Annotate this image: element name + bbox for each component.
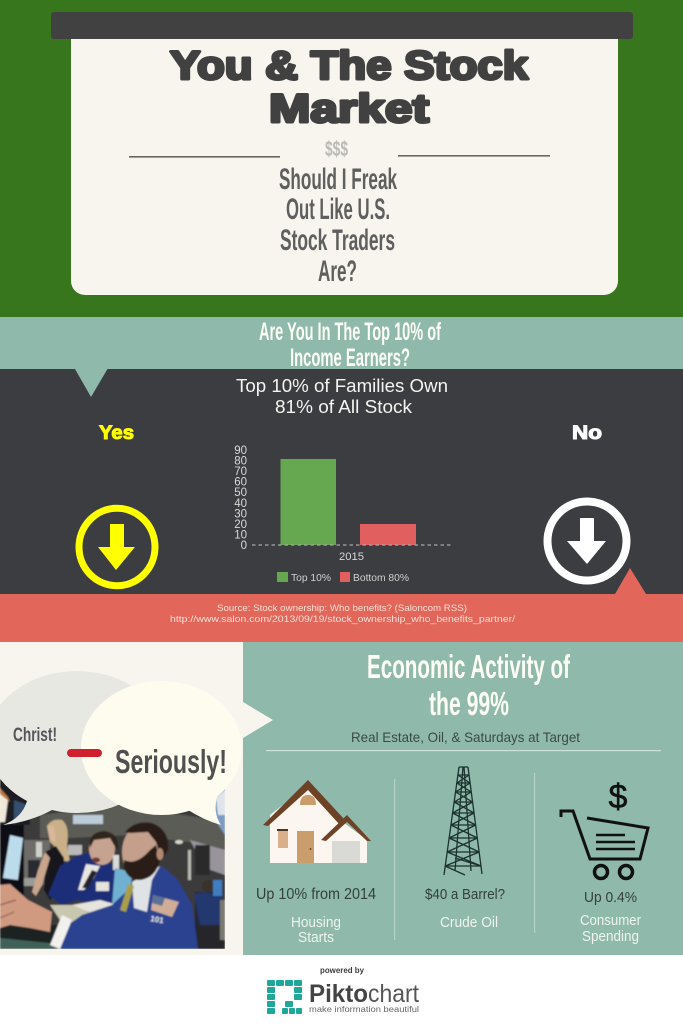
left monitor <box>0 825 24 895</box>
icon: oil derrick <box>444 767 482 875</box>
legend: Bottom 80% <box>353 572 409 584</box>
stat: consumer spending: Consumer <box>580 913 641 929</box>
yes label: Yes <box>99 423 134 444</box>
dollar signs: $$$ <box>325 138 348 161</box>
dollar sign: $ <box>609 778 628 816</box>
ceiling <box>40 805 225 850</box>
icon: white down arrow <box>548 502 626 580</box>
main trader head <box>120 830 159 864</box>
stat: housing: Housing <box>291 915 341 931</box>
y axis labels <box>234 445 247 552</box>
x axis label: 2015 <box>339 551 364 563</box>
y axis labels: 80 <box>234 456 247 468</box>
title: You & The Stock <box>170 44 529 88</box>
photo: traders <box>0 775 225 949</box>
panel: dark chart section <box>0 369 683 594</box>
source text <box>170 603 515 625</box>
photo: traders: 101 <box>150 914 165 925</box>
subtitle: Are? <box>318 255 357 288</box>
blonde woman <box>47 820 70 862</box>
band pointer <box>75 369 108 397</box>
source text: http://www.salon.com/2013/09/19/stock_ownership_who_benefits_partner/ <box>170 614 515 625</box>
top left corner <box>0 780 30 825</box>
y axis labels: 60 <box>234 477 247 489</box>
stat: housing: Starts <box>298 930 334 946</box>
wordmark: chart <box>368 980 419 1008</box>
icon: house <box>263 780 371 863</box>
panel: header <box>0 0 683 317</box>
heading: the 99% <box>429 685 509 722</box>
legend: Top 10% <box>291 572 331 584</box>
subtitle <box>279 163 397 288</box>
panel: source footer band <box>0 568 683 642</box>
red pointer <box>615 568 646 594</box>
back trader <box>194 892 213 936</box>
stat: consumer spending: Spending <box>582 929 639 945</box>
chart title: Top 10% of Families Own <box>236 375 448 396</box>
y axis labels: 70 <box>234 466 247 478</box>
y axis labels: 90 <box>234 445 247 457</box>
legend <box>277 572 409 584</box>
no label: No <box>572 423 602 444</box>
bubble: Seriously <box>81 681 242 825</box>
y axis labels: 40 <box>234 498 247 510</box>
bar chart <box>234 445 452 584</box>
panel: top 10% question band <box>0 317 683 372</box>
subtitle: Should I Freak <box>279 163 397 196</box>
stat: crude oil: $40 a Barrel? <box>425 886 505 903</box>
heading <box>367 648 571 722</box>
y axis labels: 50 <box>234 487 247 499</box>
stat: housing <box>256 886 376 946</box>
stat: consumer spending <box>580 889 641 945</box>
red dash <box>67 749 102 757</box>
Christ! text: Christ! <box>13 725 57 746</box>
panel: traders photo and speech bubbles <box>0 642 243 955</box>
stat: housing: Up 10% from 2014 <box>256 886 376 903</box>
background shelves <box>22 840 50 885</box>
bar: bottom 80% <box>360 524 416 545</box>
subtitle: Stock Traders <box>280 224 395 257</box>
hanger bar <box>51 12 633 39</box>
y axis labels: 20 <box>234 519 247 531</box>
title <box>170 44 529 131</box>
wordmark: make information beautiful <box>309 1005 419 1014</box>
powered by: powered by <box>320 965 364 975</box>
y axis labels: 0 <box>241 540 247 552</box>
wordmark: Pikto <box>309 980 368 1008</box>
y axis labels: 30 <box>234 508 247 520</box>
panel: economic activity <box>243 642 683 955</box>
question heading: Are You In The Top 10% of <box>259 318 441 346</box>
main trader jacket <box>60 866 198 949</box>
middle trader <box>47 852 115 905</box>
question heading: Income Earners? <box>290 344 410 372</box>
source text: Source: Stock ownership: Who benefits? (Saloncom RSS) <box>217 603 467 614</box>
stat: crude oil: Crude Oil <box>440 915 498 931</box>
bubble: Christ <box>0 671 167 825</box>
bar: top 10% <box>280 459 336 545</box>
top right corner <box>216 789 225 836</box>
chart title <box>236 375 448 417</box>
question heading <box>259 318 441 372</box>
heading: Economic Activity of <box>367 648 571 685</box>
flag patch <box>151 895 179 917</box>
desk and papers <box>49 904 91 923</box>
light blue shirt <box>112 868 132 905</box>
Seriously! text: Seriously! <box>115 743 227 780</box>
bubble pointer <box>243 702 273 738</box>
stat: consumer spending: Up 0.4% <box>584 889 637 906</box>
y axis labels: 10 <box>234 530 247 542</box>
stat: crude oil <box>425 886 505 931</box>
title: Market <box>269 87 429 131</box>
panel: piktochart footer <box>0 955 683 1024</box>
icon: shopping cart <box>561 778 648 878</box>
chart title: 81% of All Stock <box>275 396 413 417</box>
hand <box>0 884 52 932</box>
icon: yellow down arrow <box>79 508 155 586</box>
subheading: Real Estate, Oil, & Saturdays at Target <box>351 729 580 745</box>
logo mark <box>267 980 302 1014</box>
wordmark <box>309 980 419 1014</box>
card <box>71 25 618 295</box>
subtitle: Out Like U.S. <box>286 193 390 226</box>
